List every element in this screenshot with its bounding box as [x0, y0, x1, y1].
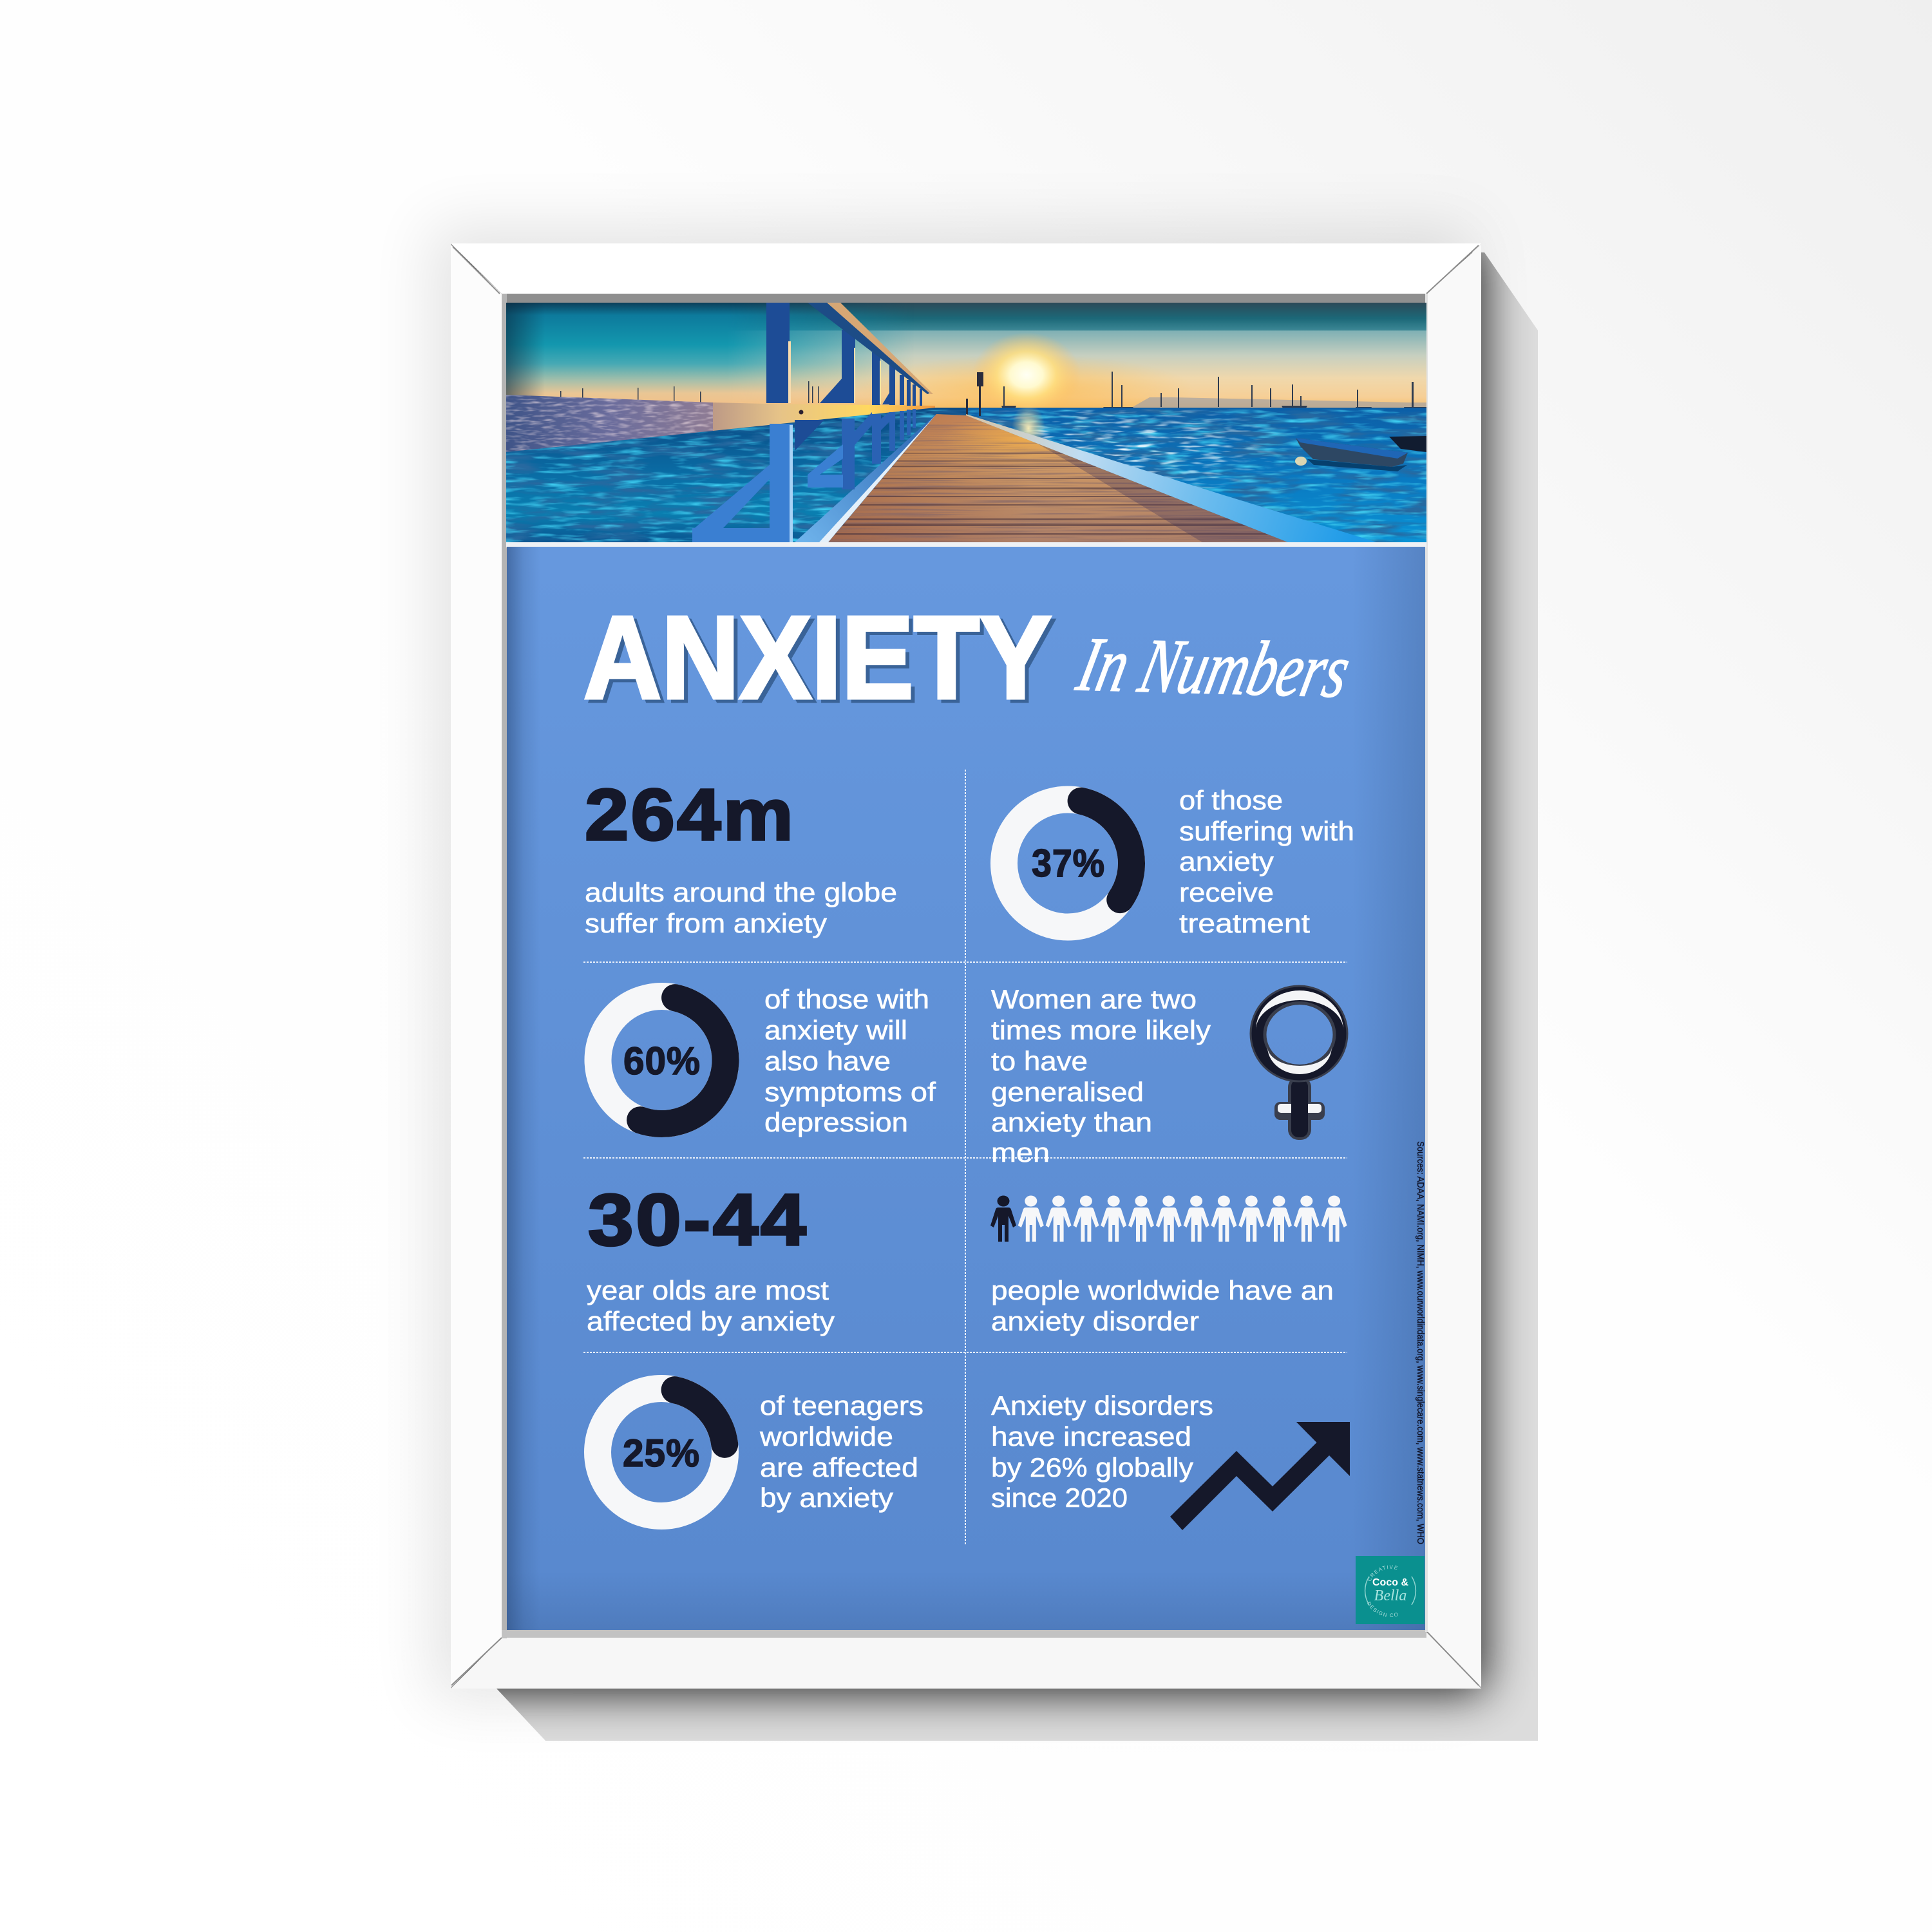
number: 30-44 [588, 1179, 808, 1260]
percent: 25% [623, 1432, 700, 1475]
stat: 30-44 [587, 1179, 835, 1336]
sun [883, 334, 1171, 408]
description: men [991, 1137, 1050, 1168]
description: anxiety than [991, 1107, 1152, 1137]
sources: Sources: ADAA, NAMI.org, NIMH, www.ourworldindata.org, www.singlecare.com, www.statnews.com, WHO [1415, 1141, 1426, 1544]
donut 25% [586, 1377, 737, 1528]
ambient shadow around frame [431, 225, 1475, 1700]
grid dividers [583, 770, 1347, 1544]
description: by anxiety [760, 1482, 893, 1513]
description: symptoms of [764, 1077, 936, 1107]
description: of those [1179, 785, 1283, 815]
description: Anxiety disorders [991, 1390, 1213, 1421]
stat: 25% [586, 1377, 923, 1528]
description: also have [764, 1046, 891, 1076]
logo: Coco & Bella: Coco & [1372, 1577, 1408, 1588]
description: worldwide [759, 1421, 893, 1452]
description: generalised [991, 1077, 1144, 1107]
donut 60% [586, 985, 737, 1135]
title: ANXIETY [583, 591, 1052, 723]
description: suffer from anxiety [585, 908, 827, 938]
stat: 60% [586, 984, 936, 1137]
icon: female symbol [1250, 985, 1348, 1140]
stat: 264m [585, 774, 897, 938]
description: year olds are most [587, 1275, 829, 1305]
description [759, 1390, 923, 1513]
description: since 2020 [991, 1482, 1128, 1513]
description: anxiety will [764, 1015, 907, 1045]
island and moored yachts [560, 372, 1426, 408]
pier edges [795, 414, 1377, 542]
description: to have [991, 1046, 1088, 1076]
percent: 37% [1032, 842, 1105, 885]
number: 264m [585, 774, 795, 855]
description: adults around the globe [585, 877, 897, 907]
subtitle: In Numbers [1070, 621, 1358, 714]
description: treatment [1179, 908, 1310, 938]
description [991, 984, 1211, 1168]
stat: 37% [992, 785, 1354, 939]
logo: Coco & Bella [1356, 1556, 1425, 1624]
logo: Coco & Bella: CREATIVE [1368, 1565, 1397, 1581]
railing posts and braces [692, 303, 922, 542]
moored boats [1295, 436, 1426, 471]
cast shadow of frame [444, 237, 1546, 1750]
logo: Coco & Bella: DESIGN CO [1367, 1601, 1397, 1617]
pier deck [824, 412, 1294, 542]
description [764, 984, 936, 1137]
title: ANXIETY [587, 594, 1056, 726]
sign post [966, 372, 983, 416]
description: times more likely [991, 1015, 1211, 1045]
description: anxiety disorder [991, 1306, 1199, 1336]
description: of teenagers [760, 1390, 923, 1421]
white band under photo [506, 542, 1426, 547]
description: people worldwide have an [991, 1275, 1334, 1305]
percent: 60% [623, 1039, 701, 1083]
description: are affected [760, 1452, 918, 1482]
stat: 26% increase [991, 1390, 1350, 1530]
description: of those with [764, 984, 929, 1014]
photo: pier at sunset [506, 303, 1426, 542]
logo: Coco & Bella: Bella [1374, 1587, 1406, 1604]
top handrail [808, 303, 933, 394]
description [585, 877, 897, 938]
description: suffering with [1179, 816, 1354, 846]
blue poster panel [507, 547, 1425, 1630]
description [991, 1390, 1213, 1513]
picture frame [451, 243, 1481, 1689]
icon: row of people [990, 1195, 1347, 1242]
donut 37% [992, 788, 1143, 939]
icon: rising arrow [1170, 1422, 1350, 1530]
description: by 26% globally [991, 1452, 1193, 1482]
fence netting and wooden beam [506, 395, 935, 452]
stat: women [991, 984, 1348, 1168]
sky [506, 303, 1426, 413]
description [1179, 785, 1354, 938]
description: anxiety [1179, 846, 1274, 876]
description [587, 1275, 835, 1336]
water [506, 404, 1426, 542]
description: have increased [991, 1421, 1191, 1452]
description: depression [764, 1107, 908, 1137]
description: Women are two [991, 984, 1197, 1014]
stat: people worldwide [990, 1195, 1347, 1336]
description: affected by anxiety [587, 1306, 835, 1336]
description [991, 1275, 1334, 1336]
description: receive [1179, 877, 1274, 907]
